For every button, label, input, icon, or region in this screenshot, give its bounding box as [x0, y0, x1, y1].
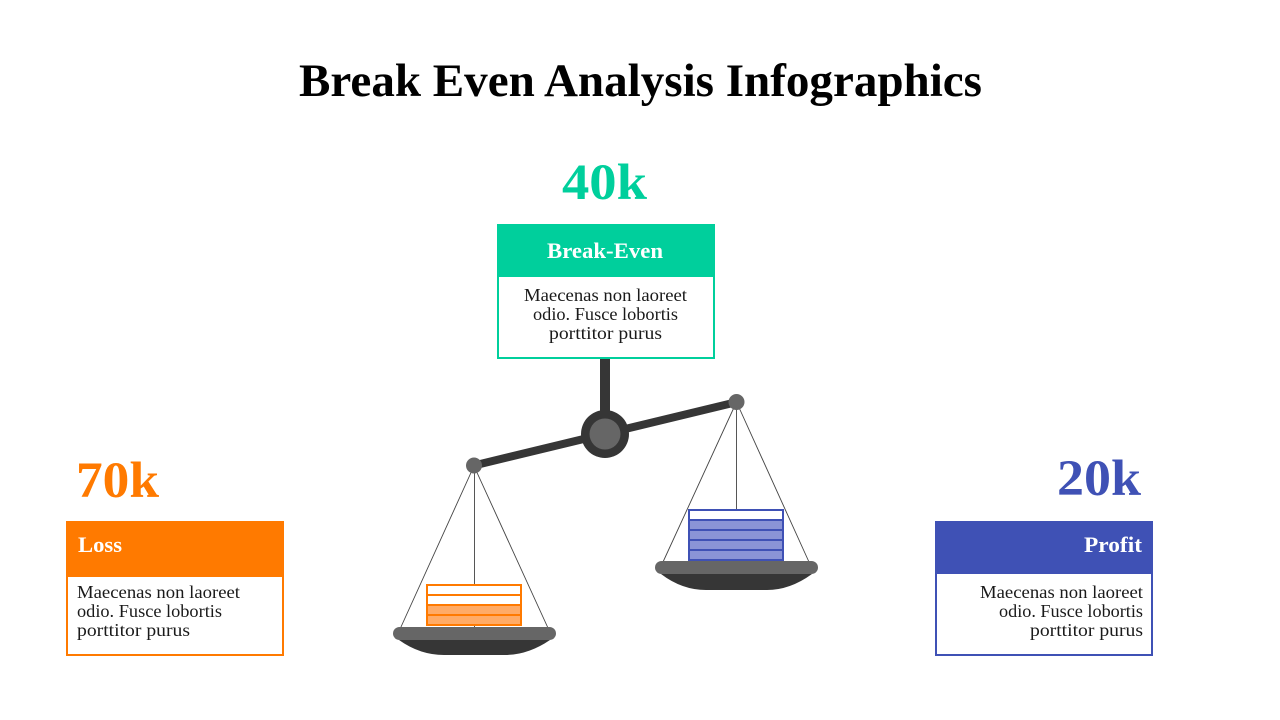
card: loss: porttitor purus [77, 620, 190, 640]
right knob [728, 394, 744, 410]
card: loss: Maecenas non laoreet [77, 582, 240, 602]
left bowl [399, 640, 550, 655]
card: loss [66, 521, 284, 655]
left pan rim [393, 627, 556, 640]
left weight stack [427, 585, 521, 625]
card: loss: Loss [78, 532, 122, 557]
title: Break Even Analysis Infographics [299, 55, 982, 107]
card: profit: porttitor purus [1030, 620, 1143, 640]
card: profit: odio. Fusce lobortis [999, 601, 1143, 621]
card: break-even [497, 224, 715, 358]
scale post [600, 359, 610, 415]
right pan rim [655, 561, 818, 574]
right strings [663, 402, 809, 562]
value: 20k: 20k [1057, 451, 1142, 507]
panel: loss [66, 453, 284, 655]
scale pivot [581, 410, 629, 458]
panel: break-even [497, 155, 715, 358]
card: break-even: odio. Fusce lobortis [533, 304, 678, 324]
card: profit [935, 521, 1153, 655]
balance scale [393, 359, 818, 655]
card: loss: odio. Fusce lobortis [77, 601, 222, 621]
value: 40k: 40k [562, 155, 648, 211]
right bowl [661, 574, 812, 590]
card: profit: Profit [1084, 532, 1143, 557]
card: break-even: porttitor purus [549, 323, 662, 343]
left pan assembly [393, 458, 556, 655]
scale beam [474, 402, 737, 466]
right pan assembly [655, 394, 818, 590]
left knob [466, 458, 482, 474]
left strings [400, 466, 548, 628]
card: break-even: Break-Even [547, 238, 663, 263]
card: break-even: Maecenas non laoreet [524, 285, 687, 305]
right weight stack [689, 510, 783, 560]
panel: profit [935, 451, 1153, 655]
value: 70k: 70k [76, 453, 160, 509]
card: profit: Maecenas non laoreet [980, 582, 1143, 602]
